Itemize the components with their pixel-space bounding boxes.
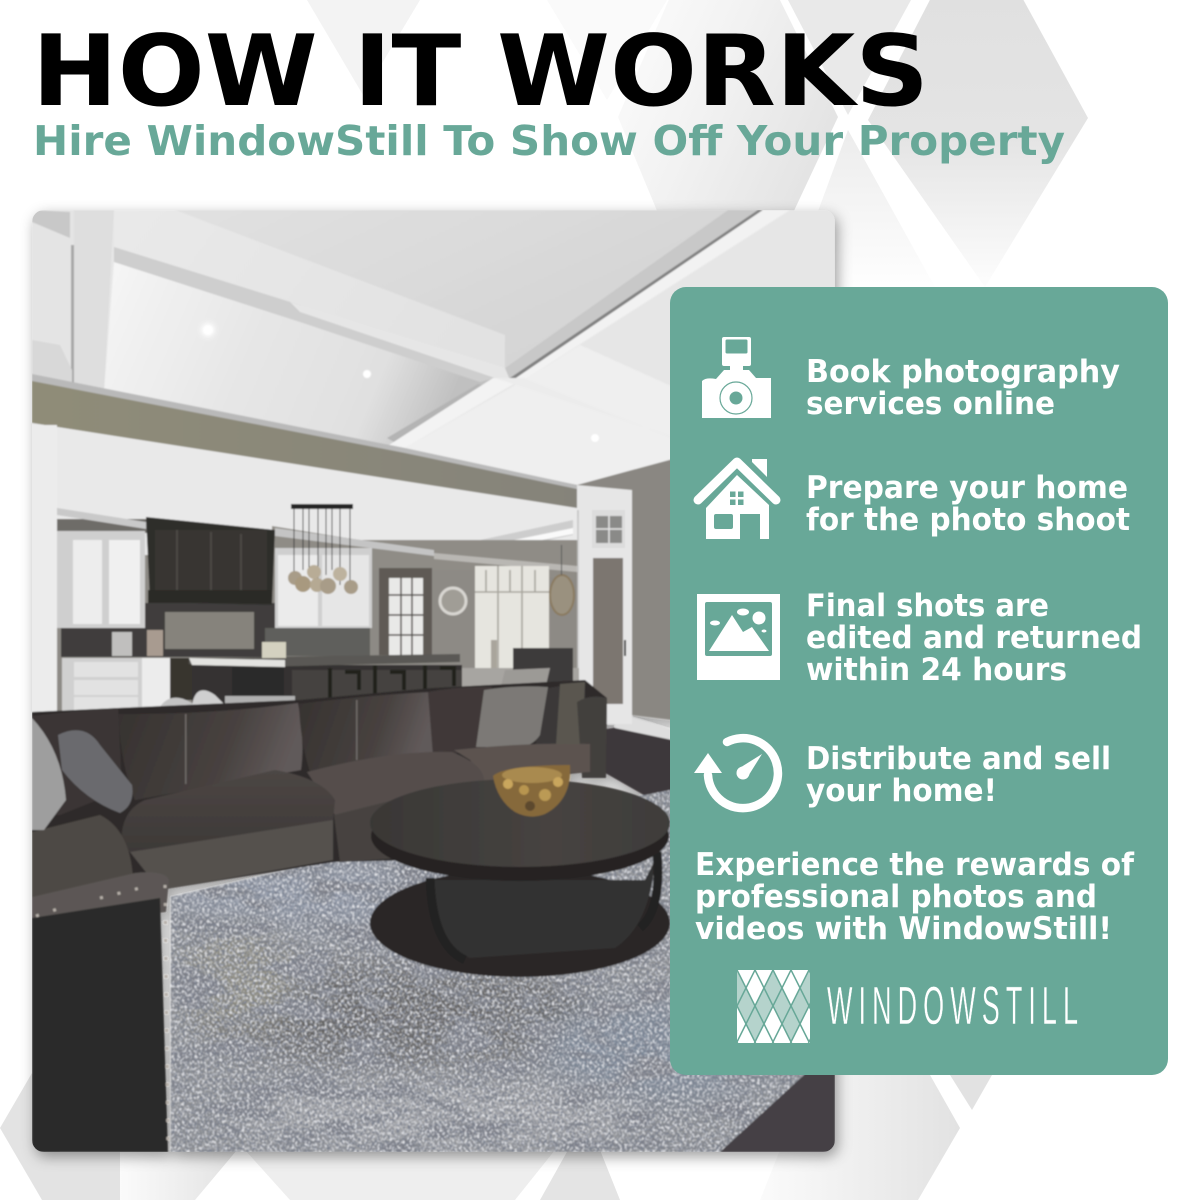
lower ceiling [56, 426, 579, 556]
french door [379, 568, 432, 655]
photo: living room interior [32, 210, 835, 1152]
icon: house [698, 459, 776, 539]
floor [600, 725, 835, 860]
coffee table [370, 779, 670, 977]
step 2 text [806, 470, 1130, 538]
left wall [32, 425, 57, 725]
step 1 text [806, 354, 1120, 422]
logo wordmark: WINDOWSTILL [827, 976, 1078, 1037]
step 4 text: Distribute and sell [806, 741, 1111, 777]
step 3 text: Final shots are [806, 588, 1049, 624]
closing statement: Experience the rewards of [695, 847, 1134, 883]
backsplash [61, 603, 370, 657]
closing statement: professional photos and [695, 879, 1097, 915]
closing statement [695, 847, 1134, 947]
dark range hood [146, 517, 275, 605]
windows [475, 566, 549, 670]
chandelier [550, 545, 574, 615]
beam trim [32, 374, 577, 489]
dining area [462, 648, 580, 690]
logo mark: WindowStill lattice [737, 970, 810, 1043]
rug [170, 790, 835, 1152]
icon: photo print [697, 594, 780, 680]
kitchen back wall [57, 508, 577, 725]
baseboard [614, 716, 670, 741]
panel: steps [670, 287, 1168, 1075]
white upper cabinets [57, 531, 372, 628]
subtitle: Hire WindowStill To Show Off Your Property [33, 117, 1065, 165]
hardwood floor, bottom right [720, 1040, 835, 1152]
sofa backrest [32, 682, 607, 815]
title: HOW IT WORKS [32, 15, 929, 129]
step 3 text [806, 588, 1142, 688]
gold bowl [493, 765, 570, 817]
range [170, 657, 193, 701]
kitchen island [189, 642, 462, 706]
step 4 text: your home! [806, 773, 997, 809]
sofa throw pillows [32, 718, 132, 830]
wall clock [440, 588, 466, 614]
step 4 text [806, 741, 1111, 809]
closing statement: videos with WindowStill! [695, 911, 1112, 947]
entry door frame [579, 492, 632, 724]
step 1 text: Book photography [806, 354, 1120, 390]
foreground armchair [32, 872, 169, 1152]
step 3 text: within 24 hours [806, 652, 1067, 688]
right wall [578, 459, 670, 729]
step 3 text: edited and returned [806, 620, 1142, 656]
icon: gauge with arrow [694, 738, 778, 808]
pendant lights [288, 504, 358, 594]
rear cushions on kitchen side [158, 690, 295, 710]
step 2 text: Prepare your home [806, 470, 1128, 506]
sofa seats [32, 744, 590, 897]
rear ceiling beams [482, 520, 574, 540]
step 2 text: for the photo shoot [806, 502, 1130, 538]
icon: camera [702, 337, 771, 418]
wall band [32, 378, 577, 510]
ceiling [32, 210, 835, 510]
sofa [32, 680, 607, 905]
lower kitchen cabinets [62, 658, 170, 713]
step 1 text: services online [806, 386, 1055, 422]
